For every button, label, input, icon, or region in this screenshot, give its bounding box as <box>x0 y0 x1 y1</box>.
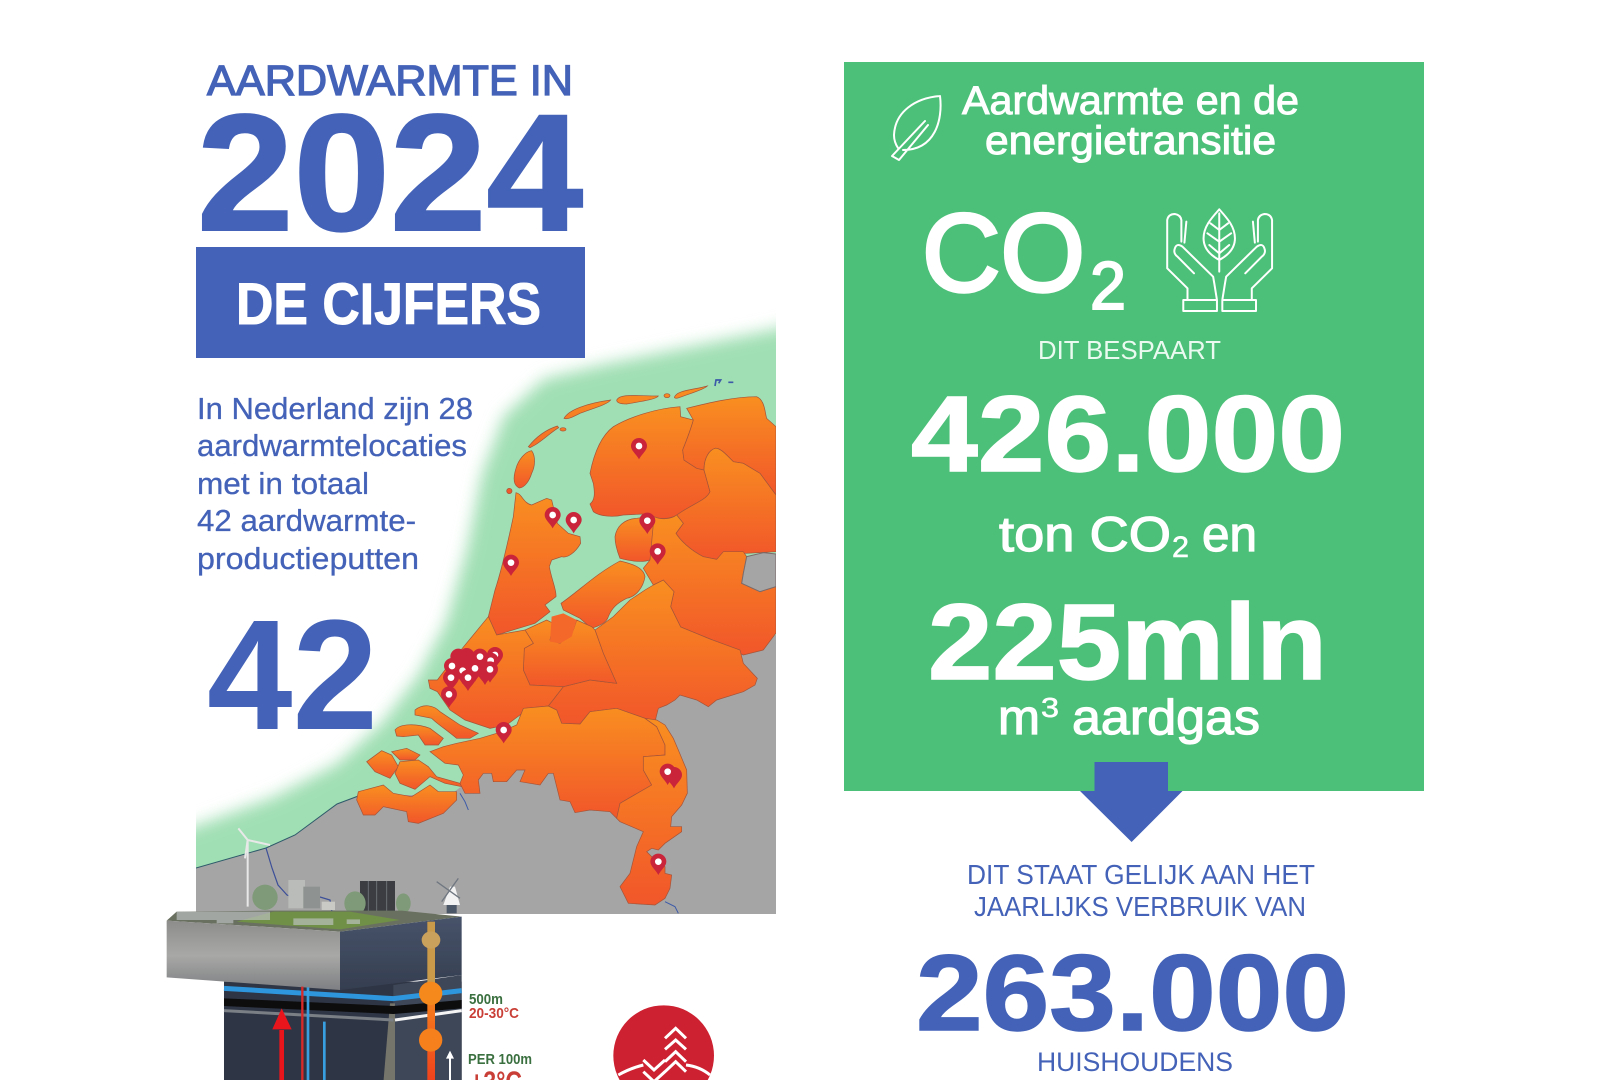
leaf <box>1204 209 1235 272</box>
trees <box>252 885 411 915</box>
Utrecht <box>523 620 617 687</box>
blue banner <box>196 247 585 358</box>
northern provinces <box>488 380 776 655</box>
intro text: met in totaal <box>197 466 369 501</box>
intro text: In Nederland zijn 28 <box>197 391 473 426</box>
m3 aardgas: m <box>998 691 1040 745</box>
Friesland <box>590 407 710 519</box>
right hand <box>1222 214 1272 311</box>
m3 aardgas: aardgas <box>1072 691 1260 745</box>
panel heading: Aardwarmte en de <box>962 79 1299 123</box>
intro text <box>197 391 473 576</box>
ton CO2 en: 2 <box>1172 531 1189 564</box>
white line <box>395 1011 462 1020</box>
location pins north <box>503 438 666 576</box>
Limburg <box>617 718 687 905</box>
central and southern provinces <box>357 580 757 913</box>
green panel <box>844 62 1424 791</box>
upper block right face <box>340 917 462 990</box>
big number 42: 42 <box>207 588 378 763</box>
leaf icon <box>892 96 941 160</box>
intro text: aardwarmtelocaties <box>197 428 467 463</box>
title <box>197 57 583 266</box>
left hand <box>1167 214 1217 311</box>
German enclave <box>742 553 776 592</box>
gray line <box>224 1011 393 1020</box>
river Schelde <box>460 793 468 810</box>
intro text: productieputten <box>197 541 419 576</box>
263.000: 263.000 <box>916 932 1349 1053</box>
rooftops <box>177 912 360 925</box>
Noordoostpolder <box>615 517 657 561</box>
border line Belgium <box>266 848 332 912</box>
PER 100m: PER 100m <box>468 1051 532 1068</box>
500m: 500m <box>469 991 503 1008</box>
upper block left face <box>167 921 340 990</box>
map of the Netherlands <box>196 318 776 914</box>
depth labels <box>468 991 532 1080</box>
equivalence label <box>967 859 1315 922</box>
m3 aardgas <box>998 691 1260 745</box>
Groningen <box>683 397 776 495</box>
Zeeuws-Vlaanderen <box>357 785 457 823</box>
savings label: DIT BESPAART <box>1038 335 1221 365</box>
Rottumeroog marks <box>715 380 733 386</box>
CO2 large: 2 <box>1090 248 1126 324</box>
Gelderland <box>548 580 757 724</box>
wind turbine <box>238 828 270 907</box>
black layer <box>224 998 462 1014</box>
red circle icon <box>613 1005 714 1080</box>
ton CO2 en <box>999 508 1257 564</box>
surface with houses <box>167 911 462 932</box>
hands with leaf icon <box>1167 209 1272 311</box>
equivalence label: JAARLIJKS VERBRUIK VAN <box>974 891 1306 922</box>
panel heading <box>962 79 1299 163</box>
426.000: 426.000 <box>911 373 1345 494</box>
red arrow <box>272 1008 292 1080</box>
Flevoland <box>561 561 645 628</box>
Noord-Brabant <box>430 706 665 818</box>
Schouwen-Duiveland <box>395 725 443 745</box>
Noord-Beveland <box>392 748 420 760</box>
m3 aardgas: 3 <box>1041 692 1059 723</box>
Het Gooi <box>550 613 577 643</box>
river Maas <box>665 902 678 913</box>
coast line Belgium <box>196 795 361 868</box>
sea <box>196 318 776 868</box>
intro text: 42 aardwarmte- <box>197 503 416 538</box>
neighbouring land <box>196 635 776 914</box>
CO2 large: CO <box>922 192 1085 315</box>
white arrow <box>446 1051 454 1080</box>
black tower <box>360 881 395 914</box>
Overijssel <box>643 515 776 655</box>
location pins south <box>441 647 682 875</box>
chevrons <box>618 1028 710 1080</box>
225mln: 225mln <box>928 581 1327 702</box>
windmill <box>437 878 460 913</box>
Noord-Holland <box>488 493 581 635</box>
equivalence label: DIT STAAT GELIJK AAN HET <box>967 859 1315 890</box>
lower strata <box>224 982 462 1080</box>
ton CO2 en: en <box>1202 508 1257 562</box>
eroded strip <box>383 1003 395 1080</box>
heading line: AARDWARMTE IN <box>207 57 573 105</box>
Texel <box>514 451 535 488</box>
Wadden islands <box>507 386 707 494</box>
ton CO2 en: ton CO <box>999 508 1171 562</box>
red line <box>299 987 306 1080</box>
gray buildings <box>288 880 335 910</box>
Goeree-Overflakkee <box>415 706 478 738</box>
grass field <box>237 912 400 929</box>
panel heading: energietransitie <box>985 119 1276 163</box>
households: HUISHOUDENS <box>1037 1047 1233 1077</box>
geothermal cross-section illustration <box>167 828 462 1080</box>
blue aquifer band <box>224 988 462 999</box>
banner text: DE CIJFERS <box>236 272 541 337</box>
well pipe <box>419 922 442 1080</box>
Walcheren <box>367 751 398 778</box>
Zuid-Beveland <box>395 760 462 789</box>
year: 2024 <box>197 81 583 266</box>
blue arrow down <box>1080 762 1182 842</box>
Zuid-Holland <box>428 617 563 728</box>
blue lines <box>308 987 324 1080</box>
20-30C: 20-30°C <box>469 1005 519 1022</box>
Drenthe <box>676 448 776 559</box>
shaded right side <box>393 975 462 1080</box>
